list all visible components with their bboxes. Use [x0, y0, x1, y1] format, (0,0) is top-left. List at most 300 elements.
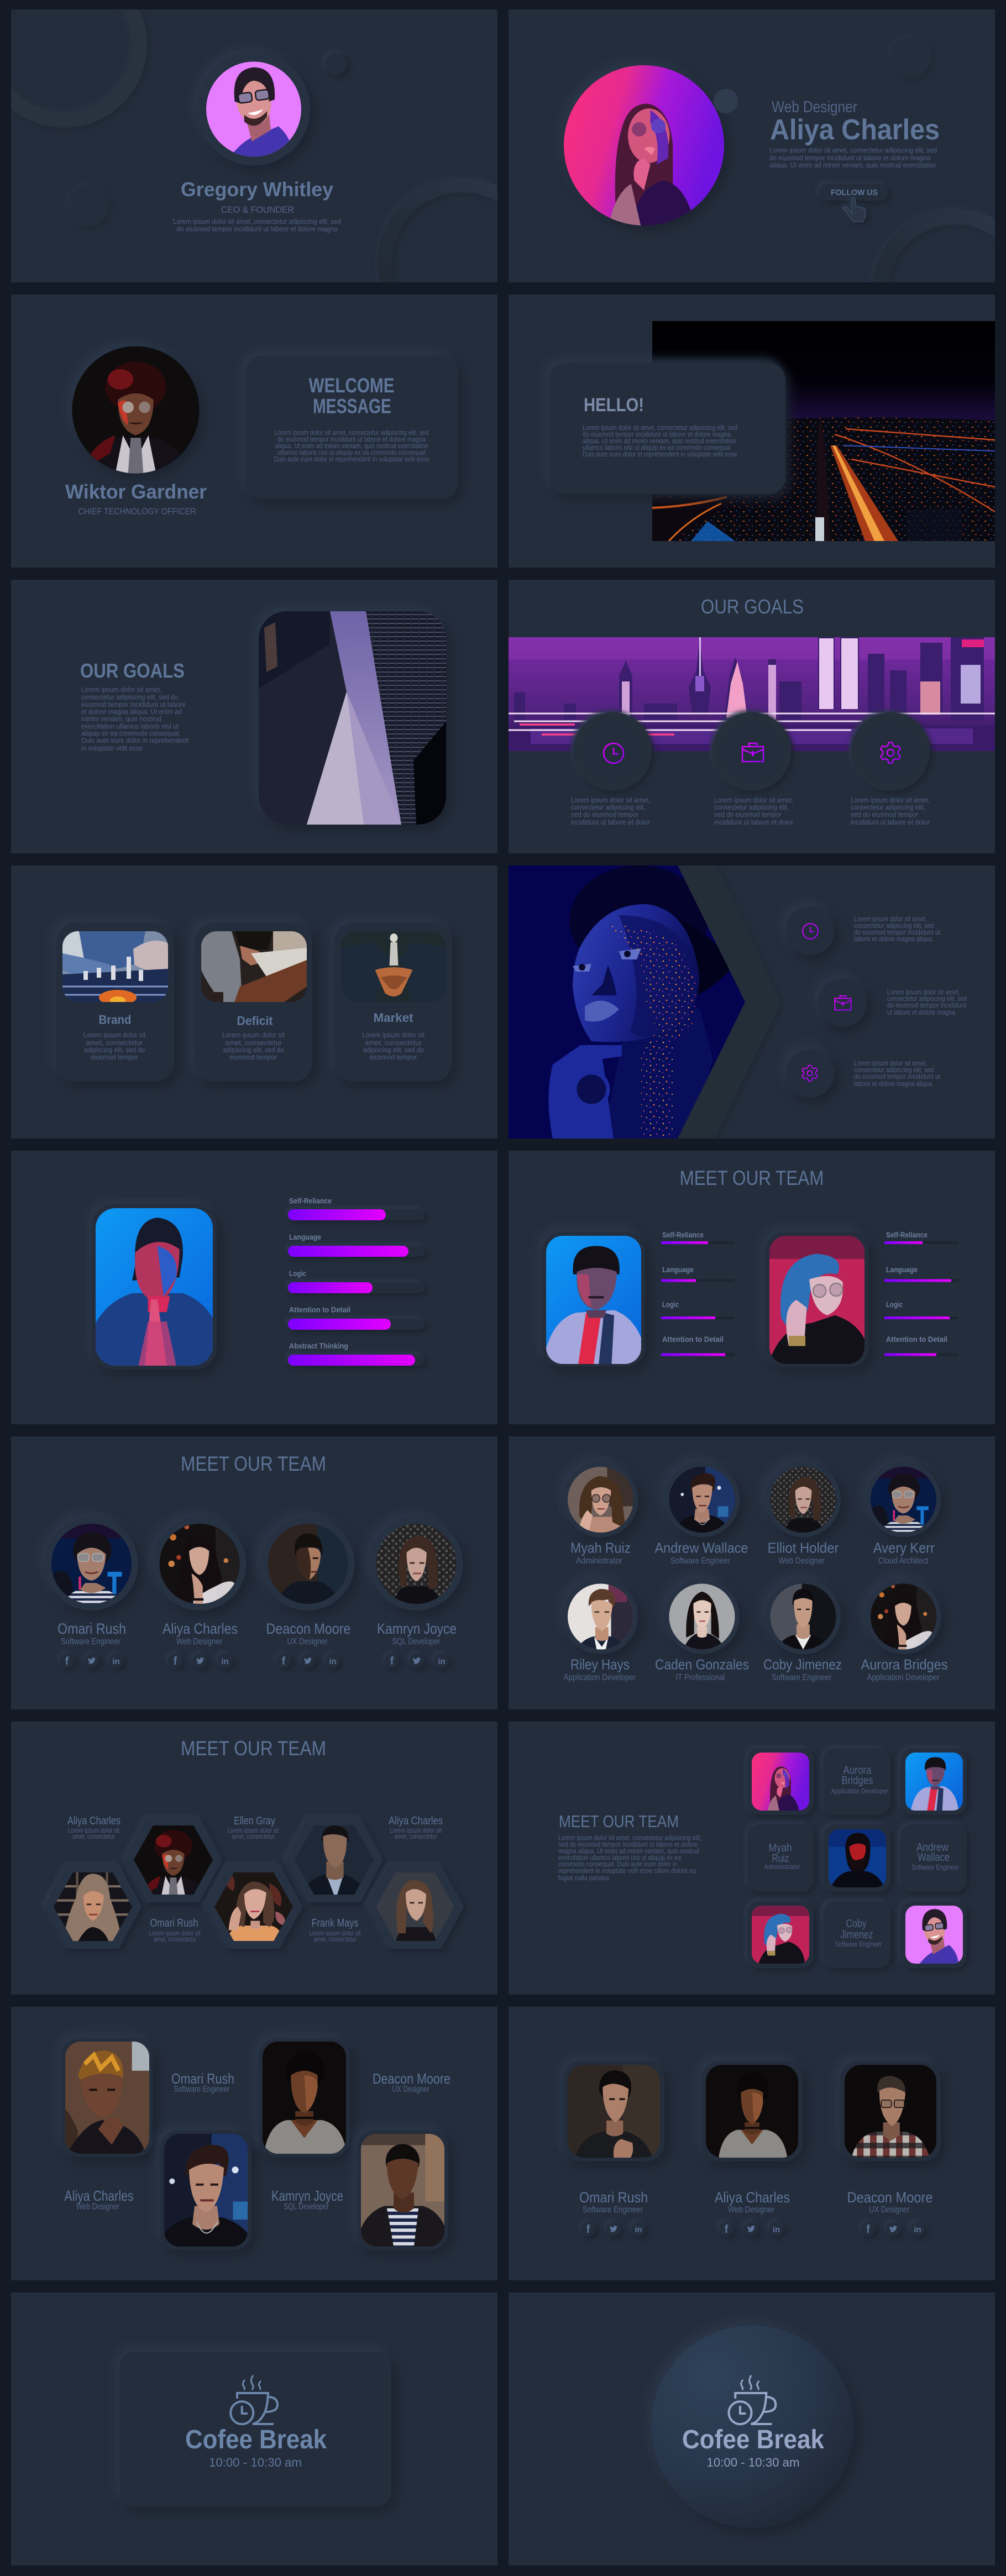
hexagon photo 3	[207, 1867, 300, 1947]
name: Gregory Whitley	[181, 178, 333, 201]
text block 3	[854, 1059, 940, 1088]
photo: man in cap	[75, 1204, 233, 1370]
text block 1: consectetur adipiscing elit, sed	[854, 921, 934, 930]
skill bars left: Attention to Detail	[662, 1335, 724, 1344]
body text: eiusmod tempor incididunt ut labore	[81, 700, 186, 709]
body text	[583, 423, 737, 458]
goal text 3: sed do eiusmod tempor	[851, 810, 919, 819]
text block 3: labore et dolore magna aliqua.	[854, 1079, 934, 1088]
body text: aliquip ex ea commodo consequat.	[81, 729, 181, 737]
tile: Myah Ruiz	[747, 1824, 814, 1892]
caption: Kamryn Joyce	[271, 2187, 343, 2212]
member: Aliya Charles: Aliya Charles	[715, 2189, 790, 2206]
body text: magna aliqua. Ut enim ad minim veniam, quis nostrud	[558, 1847, 699, 1855]
button: follow us: FOLLOW US	[831, 188, 878, 197]
photo: striped shirt man	[346, 2131, 459, 2250]
social icons: in	[914, 2225, 921, 2234]
social icons: f	[282, 1655, 286, 1667]
tile: Coby Jimenez: Software Engineer	[835, 1940, 882, 1948]
caption: Frank Mays: Lorem ipsum dolor sit	[310, 1929, 361, 1937]
member: Riley Hays: Application Developer	[564, 1673, 636, 1682]
tile: photo blue hair	[747, 1901, 814, 1968]
tile: Aurora Bridges: Bridges	[841, 1775, 873, 1787]
caption: Ellen Gray: amet, consectetur	[232, 1832, 275, 1840]
body text	[558, 1834, 701, 1882]
member: Elliot Holder	[766, 1462, 841, 1566]
card: welcome message	[246, 355, 458, 499]
member: Riley Hays: Riley Hays	[570, 1656, 630, 1672]
text block 2: Lorem ipsum dolor sit amet,	[887, 988, 960, 996]
body text: do eiusmod tempor incididunt ut labore et dolore magna	[583, 430, 731, 438]
decorative ring and discs	[892, 60, 995, 268]
skill bars	[288, 1196, 425, 1366]
time: 10:00 - 10:30 am	[706, 2456, 799, 2469]
skill bars right: Language	[886, 1265, 918, 1274]
body text: Lorem ipsum dolor sit amet, consectetur adipiscing elit, sed	[769, 146, 937, 154]
panel: brand deficit market cards	[11, 865, 497, 1139]
member: Aliya Charles: Web Designer	[728, 2205, 775, 2215]
social icons: f	[586, 2223, 590, 2236]
caption: Omari Rush: Software Engineer	[174, 2085, 230, 2094]
goal text 1: incididunt ut labore et dolor	[571, 818, 651, 826]
social icons: f	[174, 1655, 177, 1667]
goal text 1: Lorem ipsum dolor sit amet,	[571, 796, 650, 804]
small disc	[714, 89, 738, 113]
goal text 2	[714, 796, 794, 826]
member: Caden Gonzales: Caden Gonzales	[655, 1656, 749, 1672]
bar: abstract thinking: Abstract Thinking	[289, 1341, 348, 1350]
caption: Omari Rush: Omari Rush	[150, 1917, 198, 1929]
text block 2: do eiusmod tempor incididunt	[887, 1001, 966, 1009]
body text: et dolore magna aliqua. Ut enim ad	[81, 707, 182, 716]
bar: attention to detail	[288, 1305, 425, 1330]
body text: Lorem ipsum dolor sit amet, consectetur adipiscing elit, sed	[274, 428, 429, 437]
body text: ullamco laboris nisi ut aliquip ex ea commodo consequat	[277, 448, 426, 457]
caption: Ellen Gray: Lorem ipsum dolor sit	[228, 1826, 279, 1834]
tile: photo Gregory	[900, 1901, 967, 1968]
photo: Aliya	[564, 65, 724, 225]
caption: Aliya Charles: Web Designer	[76, 2202, 120, 2212]
goal text 3: Lorem ipsum dolor sit amet,	[851, 796, 930, 804]
body text: exercitation ullamco laboris nisi ut aliquip ex ea	[558, 1854, 682, 1861]
member: Deacon Moore	[840, 2061, 941, 2236]
title: Cofee Break	[185, 2425, 327, 2454]
name: Wiktor Gardner	[65, 480, 207, 503]
member: Myah Ruiz	[563, 1462, 638, 1566]
text block 2: consectetur adipiscing elit, sed	[887, 994, 967, 1003]
panel: our goals with skyline	[509, 580, 995, 853]
tile: Aurora Bridges: Aurora	[843, 1764, 872, 1776]
body text: fugiat nulla pariatur.	[558, 1874, 611, 1882]
social icons: f	[390, 1655, 394, 1667]
panel: coffee break card	[11, 2292, 497, 2565]
avatar: Gregory	[197, 53, 310, 166]
member: Omari Rush: Software Engineer	[583, 2205, 643, 2215]
hexagon photo 4	[287, 1820, 381, 1900]
member: Omari Rush: Software Engineer	[61, 1637, 121, 1646]
member: Andrew Wallace: Software Engineer	[670, 1556, 731, 1566]
caption: Ellen Gray	[228, 1815, 279, 1840]
card: brand: adipiscing elit, sed do	[84, 1046, 145, 1054]
caption: Ellen Gray: Ellen Gray	[234, 1815, 275, 1827]
icon: coffee cup with clock	[230, 2375, 277, 2424]
bar: attention to detail: Attention to Detail	[289, 1305, 350, 1314]
social icons	[719, 2222, 784, 2236]
panel: team grid	[509, 1722, 995, 1995]
hexagon photo 5	[369, 1867, 462, 1947]
icon: clock	[573, 712, 652, 791]
member: Andrew Wallace	[654, 1462, 748, 1566]
hexagon photo 1	[46, 1867, 139, 1947]
social icons: f	[65, 1655, 69, 1667]
body text: consectetur adipiscing elit, sed do	[81, 693, 178, 701]
card: deficit: Deficit	[237, 1014, 273, 1028]
photo: night city	[652, 321, 995, 541]
panel: meet our team four avatars	[11, 1436, 497, 1709]
member: Aliya Charles	[701, 2061, 803, 2236]
member: Omari Rush: Omari Rush	[579, 2189, 648, 2206]
body text: do eiusmod tempor incididunt ut labore et dolore magna	[177, 224, 338, 233]
member: Coby Jimenez: Software Engineer	[772, 1673, 832, 1682]
panel: hexagon team	[11, 1722, 497, 1995]
goal text 2: Lorem ipsum dolor sit amet,	[714, 796, 793, 804]
card: deficit	[195, 923, 312, 1082]
member: Kamryn Joyce: Kamryn Joyce	[377, 1620, 457, 1637]
social icons	[861, 2222, 925, 2236]
social icons: in	[221, 1657, 229, 1666]
photo: glitter face	[509, 865, 746, 1139]
member: Kamryn Joyce: SQL Developer	[392, 1637, 441, 1646]
member: Elliot Holder: Web Designer	[778, 1556, 825, 1566]
tile: Andrew Wallace: Software Engineer	[911, 1863, 960, 1871]
panel: Gregory Whitley profile	[11, 9, 497, 282]
bar: abstract thinking	[288, 1341, 425, 1366]
member: Aurora Bridges: Aurora Bridges	[861, 1656, 947, 1672]
job title: Web Designer	[772, 98, 857, 116]
caption: Aliya Charles: Lorem ipsum dolor sit	[68, 1826, 119, 1834]
panel: three portraits	[509, 2007, 995, 2280]
photo: quiff man	[149, 2131, 262, 2250]
text block 3: do eiusmod tempor incididunt ut	[854, 1072, 940, 1080]
card: market: adipiscing elit, sed do	[363, 1046, 423, 1054]
skill bars right: Attention to Detail	[886, 1335, 947, 1344]
social icons: f	[866, 2223, 870, 2236]
card: deficit: adipiscing elit, sed do	[223, 1046, 284, 1054]
card: deficit: Lorem ipsum dolor sit	[222, 1031, 285, 1039]
body text: Lorem ipsum dolor sit amet, consectetur adipiscing elit, sed	[583, 423, 737, 432]
caption: Aliya Charles: Aliya Charles	[64, 2187, 134, 2204]
chevron band	[715, 1007, 779, 1139]
member: Avery Kerr: Avery Kerr	[873, 1540, 935, 1556]
social icons: in	[112, 1657, 120, 1666]
panel: Wiktor Gardner welcome	[11, 295, 497, 568]
goal text 1	[571, 796, 651, 826]
caption: Deacon Moore	[373, 2070, 450, 2094]
social icons	[60, 1654, 123, 1668]
goal text 1: consectetur adipiscing elit,	[571, 803, 646, 811]
role: CHIEF TECHNOLOGY OFFICER	[78, 507, 196, 516]
member: Aliya Charles: Aliya Charles	[163, 1620, 238, 1637]
caption: Aliya Charles right: amet, consectetur	[395, 1832, 437, 1840]
caption: Omari Rush	[149, 1917, 201, 1943]
photo: woman gray tee	[248, 2038, 360, 2157]
tile: Myah Ruiz: Myah	[768, 1842, 792, 1854]
member: Aurora Bridges: Application Developer	[867, 1673, 940, 1682]
skill bars right: Self-Reliance	[886, 1230, 928, 1239]
body text: ullamco laboris nisi ut aliquip ex ea commodo consequat	[583, 443, 731, 452]
caption: Omari Rush: amet, consectetur	[154, 1935, 196, 1943]
social icons	[276, 1654, 340, 1668]
tile: Aurora Bridges: Application Developer	[831, 1787, 888, 1795]
icon: gear	[851, 712, 930, 791]
goal text 3: incididunt ut labore et dolor	[851, 818, 930, 826]
icon: clock	[786, 906, 835, 955]
skill bars right	[884, 1230, 958, 1356]
caption: Frank Mays: Frank Mays	[312, 1917, 358, 1929]
social icons	[385, 1654, 449, 1668]
heading: OUR GOALS	[701, 595, 804, 618]
skill bars left	[661, 1230, 735, 1356]
body text: aliqua. Ut enim ad minim veniam, quis nostrud exercitation	[583, 437, 736, 445]
body text: reprehenderit in voluptate velit esse cillum dolore eu	[558, 1866, 696, 1875]
body text: Duis aute irure dolor in reprehenderit in voluptate velit esse	[583, 450, 737, 458]
member: Caden Gonzales: IT Professional	[675, 1673, 725, 1682]
photo: woman blue hair	[753, 1232, 881, 1367]
tile: Andrew Wallace: Andrew	[916, 1842, 949, 1854]
social icons	[581, 2222, 646, 2236]
skill bars left: Self-Reliance	[662, 1230, 704, 1239]
name: Aliya Charles	[770, 114, 940, 146]
body text	[274, 428, 429, 463]
body text: in voluptate velit esse	[81, 744, 143, 752]
sphere	[651, 2326, 854, 2528]
skill bars left: Logic	[662, 1300, 679, 1309]
skill bars left: Language	[662, 1265, 694, 1274]
member: Omari Rush	[563, 2061, 664, 2236]
panel: coffee break sphere	[509, 2292, 995, 2565]
panel: meet our team skills pair	[509, 1151, 995, 1424]
card: deficit: eiusmod tempor	[230, 1053, 277, 1061]
tile: photo bearded man	[823, 1824, 890, 1892]
text block 2: ut labore et dolore magna	[887, 1008, 956, 1016]
member: Omari Rush	[45, 1517, 138, 1668]
text block 3: Lorem ipsum dolor sit amet,	[854, 1059, 927, 1067]
panel: our goals with building	[11, 580, 497, 853]
card: deficit: amet, consectetur	[225, 1038, 282, 1047]
member: Omari Rush: Omari Rush	[57, 1620, 126, 1637]
social icons: in	[438, 1657, 446, 1666]
card: brand	[56, 923, 174, 1082]
hexagon photo 2	[127, 1820, 220, 1900]
member: Deacon Moore: Deacon Moore	[847, 2189, 933, 2206]
member: Deacon Moore: UX Designer	[287, 1637, 328, 1646]
tile: photo pink woman	[747, 1748, 814, 1815]
caption: Kamryn Joyce: SQL Developer	[284, 2202, 329, 2212]
bar: language	[288, 1232, 425, 1257]
heading: MEET OUR TEAM	[181, 1452, 326, 1475]
tile: Coby Jimenez: Coby	[846, 1918, 867, 1930]
goal text 2: consectetur adipiscing elit,	[714, 803, 789, 811]
bar: self-reliance	[288, 1196, 425, 1220]
body text: Lorem ipsum dolor sit amet, consectetur adipiscing elit, sed	[173, 217, 341, 225]
time: 10:00 - 10:30 am	[209, 2456, 302, 2469]
caption: Deacon Moore: Deacon Moore	[373, 2070, 450, 2087]
body text	[81, 685, 188, 752]
card: brand: Brand	[98, 1012, 132, 1027]
member: Myah Ruiz: Administrator	[576, 1556, 623, 1566]
caption: Frank Mays	[310, 1917, 361, 1943]
icon: briefcase	[818, 978, 867, 1027]
photo: man blue	[530, 1232, 658, 1367]
heading: OUR GOALS	[80, 659, 185, 682]
card: market	[334, 923, 452, 1082]
caption: Deacon Moore: UX Designer	[392, 2085, 429, 2094]
photo: Wiktor	[72, 346, 199, 473]
card: brand: eiusmod tempor	[91, 1053, 139, 1061]
panel: hello with city photo	[509, 295, 995, 568]
social icons: f	[725, 2223, 729, 2236]
body text	[173, 217, 341, 233]
member: Kamryn Joyce	[369, 1517, 463, 1668]
tile: Coby Jimenez: Jimenez	[840, 1929, 873, 1941]
photo: purple skyline	[509, 637, 995, 751]
text block 1: do eiusmod tempor incididunt ut	[854, 928, 940, 936]
title: Cofee Break	[682, 2425, 824, 2454]
tile: Andrew Wallace: Wallace	[918, 1851, 950, 1864]
text block 1: Lorem ipsum dolor sit amet,	[854, 915, 927, 923]
social icons: in	[635, 2225, 642, 2234]
caption: Aliya Charles: amet, consectetur	[72, 1832, 115, 1840]
card: market: Market	[374, 1011, 413, 1025]
member: Deacon Moore: UX Designer	[869, 2205, 910, 2215]
body text: sed do eiusmod tempor incididunt ut labore et dolore	[558, 1840, 698, 1848]
body text: Lorem ipsum dolor sit amet,	[81, 685, 161, 694]
text block 1	[854, 915, 940, 943]
heading	[308, 374, 395, 418]
icon: pointing hand	[843, 198, 866, 222]
heading: HELLO!	[584, 395, 644, 416]
card: market: amet, consectetur	[365, 1038, 422, 1047]
photo: building	[259, 611, 446, 825]
body text: commodo consequat. Duis aute irure dolor in	[558, 1860, 677, 1868]
icon: gear	[786, 1049, 835, 1098]
body text: Duis aute irure dolor in reprehenderit	[81, 736, 188, 744]
caption: Aliya Charles right	[389, 1815, 443, 1840]
member: Riley Hays	[563, 1579, 638, 1682]
panel: eight avatars	[509, 1436, 995, 1709]
icon: briefcase	[712, 712, 791, 791]
member: Aliya Charles	[153, 1517, 247, 1668]
photo: headband woman	[51, 2038, 164, 2157]
card: market: eiusmod tempor	[369, 1053, 417, 1061]
caption: Omari Rush: Omari Rush	[171, 2070, 234, 2087]
role: CEO & FOUNDER	[221, 204, 294, 215]
heading: MEET OUR TEAM	[559, 1812, 679, 1831]
body text: exercitation ullamco laboris nisi ut	[81, 722, 179, 731]
member: Avery Kerr	[866, 1462, 941, 1566]
heading: WELCOME	[308, 374, 395, 397]
tile: Coby Jimenez	[823, 1901, 890, 1968]
body text: Lorem ipsum dolor sit amet, consectetur adipiscing elit,	[558, 1834, 701, 1842]
caption: Aliya Charles	[67, 1815, 120, 1840]
tile: photo man blue	[900, 1748, 967, 1815]
tile: Myah Ruiz: Ruiz	[772, 1853, 789, 1865]
member: Aliya Charles: Web Designer	[176, 1637, 223, 1646]
member: Coby Jimenez	[763, 1579, 842, 1682]
goal text 3	[851, 796, 930, 826]
member: Elliot Holder: Elliot Holder	[767, 1540, 839, 1556]
caption: Kamryn Joyce: Kamryn Joyce	[271, 2187, 343, 2204]
caption: Frank Mays: amet, consectetur	[314, 1935, 357, 1943]
heading: MEET OUR TEAM	[680, 1167, 824, 1189]
panel: staggered team photos	[11, 2007, 497, 2280]
decorative rings and discs	[86, 51, 724, 244]
caption: Aliya Charles: Aliya Charles	[67, 1815, 120, 1827]
card: brand: amet, consectetur	[86, 1038, 143, 1047]
card: brand: Lorem ipsum dolor sit	[83, 1031, 146, 1039]
caption: Aliya Charles	[64, 2187, 134, 2212]
text block 1: labore et dolore magna aliqua.	[854, 935, 934, 943]
bar: language: Language	[289, 1232, 321, 1241]
tile: Aurora Bridges	[823, 1748, 890, 1815]
caption: Omari Rush: Lorem ipsum dolor sit	[149, 1929, 201, 1937]
goal text 1: sed do eiusmod tempor	[571, 810, 639, 819]
member: Andrew Wallace: Andrew Wallace	[654, 1540, 748, 1556]
card	[120, 2352, 391, 2506]
member: Deacon Moore: Deacon Moore	[266, 1620, 350, 1637]
member: Deacon Moore	[261, 1517, 355, 1668]
heading: MESSAGE	[313, 395, 391, 418]
text block 2	[887, 988, 967, 1016]
bar: logic	[288, 1269, 425, 1293]
goal text 2: incididunt ut labore et dolor	[714, 818, 794, 826]
body text: minim veniam, quis nostrud	[81, 715, 161, 723]
skill bars right: Logic	[886, 1300, 903, 1309]
body text: aliqua. Ut enim ad minim veniam, quis nostrud exercitation	[769, 161, 936, 169]
goal text 2: sed do eiusmod tempor	[714, 810, 782, 819]
goal text 3: consectetur adipiscing elit,	[851, 803, 925, 811]
card: market: Lorem ipsum dolor sit	[362, 1031, 425, 1039]
body text: do eiusmod tempor incididunt ut labore et dolore magna	[769, 154, 931, 162]
card: hello	[549, 363, 785, 494]
body text: do eiusmod tempor incididunt ut labore et dolore magna	[277, 435, 426, 443]
caption: Omari Rush	[171, 2070, 234, 2094]
body text: Duis aute irure dolor in reprehenderit in voluptate velit esse	[274, 455, 429, 463]
member: Myah Ruiz: Myah Ruiz	[570, 1540, 631, 1556]
social icons	[168, 1654, 232, 1668]
text block 3: consectetur adipiscing elit, sed	[854, 1066, 934, 1074]
bar: self-reliance: Self-Reliance	[289, 1196, 332, 1205]
social icons: in	[773, 2225, 780, 2234]
panel: skills single	[11, 1151, 497, 1424]
body text: aliqua. Ut enim ad minim veniam, quis nostrud exercitation	[275, 442, 428, 450]
caption: Aliya Charles right: Aliya Charles	[389, 1815, 443, 1827]
member: Coby Jimenez: Coby Jimenez	[763, 1656, 842, 1672]
member: Avery Kerr: Cloud Architect	[878, 1556, 929, 1566]
caption: Aliya Charles right: Lorem ipsum dolor sit	[390, 1826, 442, 1834]
member: Aurora Bridges	[861, 1579, 947, 1682]
button: follow us	[819, 183, 888, 201]
heading: MEET OUR TEAM	[181, 1737, 326, 1760]
tile: Andrew Wallace	[900, 1824, 967, 1892]
panel: face photo with chevron	[509, 865, 995, 1139]
icon: coffee cup with clock	[729, 2375, 776, 2424]
social icons: in	[329, 1657, 337, 1666]
member: Caden Gonzales	[655, 1579, 749, 1682]
bar: logic: Logic	[289, 1269, 306, 1278]
tile: Myah Ruiz: Administrator	[764, 1863, 800, 1871]
body text	[769, 146, 937, 169]
